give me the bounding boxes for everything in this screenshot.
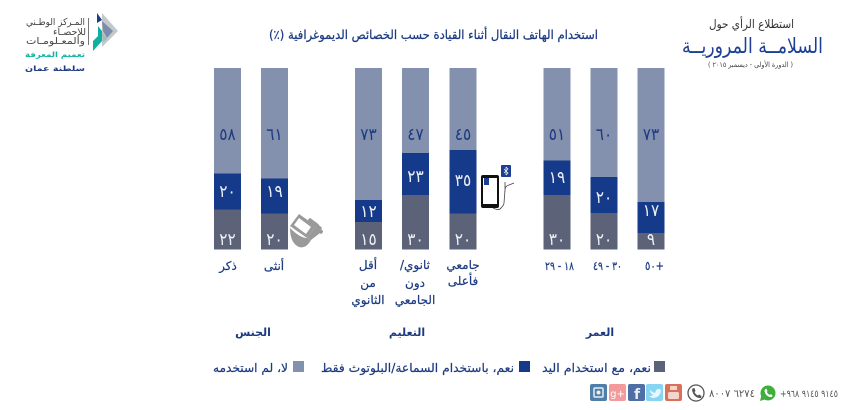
bar: female: ٦١ (266, 125, 283, 145)
label: university: جامعي (446, 258, 480, 272)
bar: age 18-29: ١٩ (549, 168, 565, 188)
icon: facebook (628, 384, 645, 403)
icon: hand holding phone (290, 214, 324, 247)
group heading: gender: الجنس (235, 326, 271, 339)
icon: google plus: g+ (610, 389, 625, 400)
social media footer (590, 384, 838, 403)
bar: secondary: ٢٣ (407, 167, 424, 187)
bar: male: ٢٢ (219, 230, 236, 250)
icon: phone with bluetooth earphones (481, 165, 514, 210)
phone number: ٨٠٠٧ ٦٢٧٤ (709, 388, 755, 400)
bar: less than secondary: ١٢ (360, 202, 377, 222)
bar: age 50+: ٩ (647, 230, 655, 250)
label: university (446, 258, 480, 288)
icon: whatsapp (760, 386, 776, 401)
label: age 18-29: ٢٩ - ١٨ (545, 259, 574, 273)
logo name text: والمعـلومـات (26, 36, 85, 47)
label: less than secondary: من (360, 276, 376, 291)
bar: age 18-29 (544, 68, 570, 250)
label: secondary: ثانوي/ (400, 258, 430, 273)
bar: secondary: ٣٠ (407, 230, 424, 250)
icon: instagram (590, 384, 607, 401)
bar: age 30-49: ٢٠ (596, 230, 612, 250)
label: secondary: الجامعي (395, 293, 435, 307)
label: university: فأعلى (448, 272, 478, 288)
icon: facebook: f (634, 387, 641, 403)
bar: age 50+: ٧٣ (643, 125, 659, 145)
header line 3: ( الدورة الأولى - ديسمبر ٢٠١٥ ) (708, 60, 793, 69)
logo name text: المـركز الوطـني (26, 17, 85, 28)
bar: age 50+ (638, 68, 664, 250)
bar: secondary (402, 68, 429, 250)
bar: male: ٥٨ (219, 125, 236, 145)
bar: age 30-49: ٦٠ (596, 125, 612, 145)
bar: university: ٤٥ (455, 125, 471, 145)
label: less than secondary (351, 257, 385, 308)
icon: google plus (609, 384, 626, 401)
bar: less than secondary: ١٥ (360, 230, 377, 250)
icon: twitter (646, 384, 663, 401)
legend (213, 361, 665, 376)
header line 2: السلامــة المروريــة (682, 34, 823, 58)
group heading: education: التعليم (389, 326, 425, 339)
label: female: أنثى (264, 258, 284, 273)
bar: female: ١٩ (266, 182, 283, 202)
category labels (218, 257, 664, 308)
label: less than secondary: الثانوي (351, 293, 385, 308)
label: less than secondary: أقل (359, 257, 377, 272)
legend: no: لا، لم استخدمه (213, 361, 288, 375)
bar: age 18-29: ٣٠ (549, 230, 565, 250)
bar: less than secondary (355, 68, 382, 250)
bar: age 50+: ١٧ (643, 201, 659, 221)
logo mark (93, 13, 118, 51)
label: secondary (395, 258, 435, 307)
bar: male (214, 68, 241, 250)
header line 1: استطلاع الرأي حول (709, 16, 794, 32)
icon: youtube (665, 384, 682, 401)
bar: age 30-49: ٢٠ (596, 188, 612, 208)
header: survey title (682, 16, 823, 69)
bar: university: ٣٥ (455, 171, 471, 191)
bar: less than secondary: ٧٣ (360, 125, 377, 145)
bar: age 30-49 (590, 68, 618, 250)
logo: national centre for statistics (25, 13, 118, 73)
label: age 30-49: ٤٩ - ٣٠ (593, 259, 622, 273)
group heading: age: العمر (585, 326, 614, 339)
bar: university (450, 68, 476, 250)
bar: secondary: ٤٧ (407, 125, 424, 145)
logo name text: للإحصـاء (53, 27, 86, 38)
label: age 50+: ٥٠+ (645, 259, 664, 273)
legend: yes, hands-free: نعم، باستخدام السماعة/البلوتوث فقط (321, 361, 514, 376)
chart title: استخدام الهاتف النقال أثناء القيادة حسب الخصائص الديموغرافية (٪) (269, 26, 598, 43)
logo country: سلطنة عمان (25, 64, 85, 73)
icon: phone (688, 385, 704, 401)
logo slogan: تعميم المعرفة (25, 50, 85, 59)
legend: yes, hand-held: نعم، مع استخدام اليد (542, 361, 651, 375)
label: secondary: دون (405, 276, 425, 291)
bar: female: ٢٠ (266, 230, 283, 250)
bar: female (261, 68, 288, 250)
whatsapp number: +٩٦٨ ٩١٤٥ ٩١٤٥ (780, 389, 838, 400)
bar: age 18-29: ٥١ (549, 125, 565, 145)
label: male: ذكر (218, 259, 237, 274)
bar: university: ٢٠ (455, 230, 471, 250)
bar chart (214, 68, 664, 250)
logo name text (26, 17, 86, 47)
bar: male: ٢٠ (219, 182, 236, 202)
